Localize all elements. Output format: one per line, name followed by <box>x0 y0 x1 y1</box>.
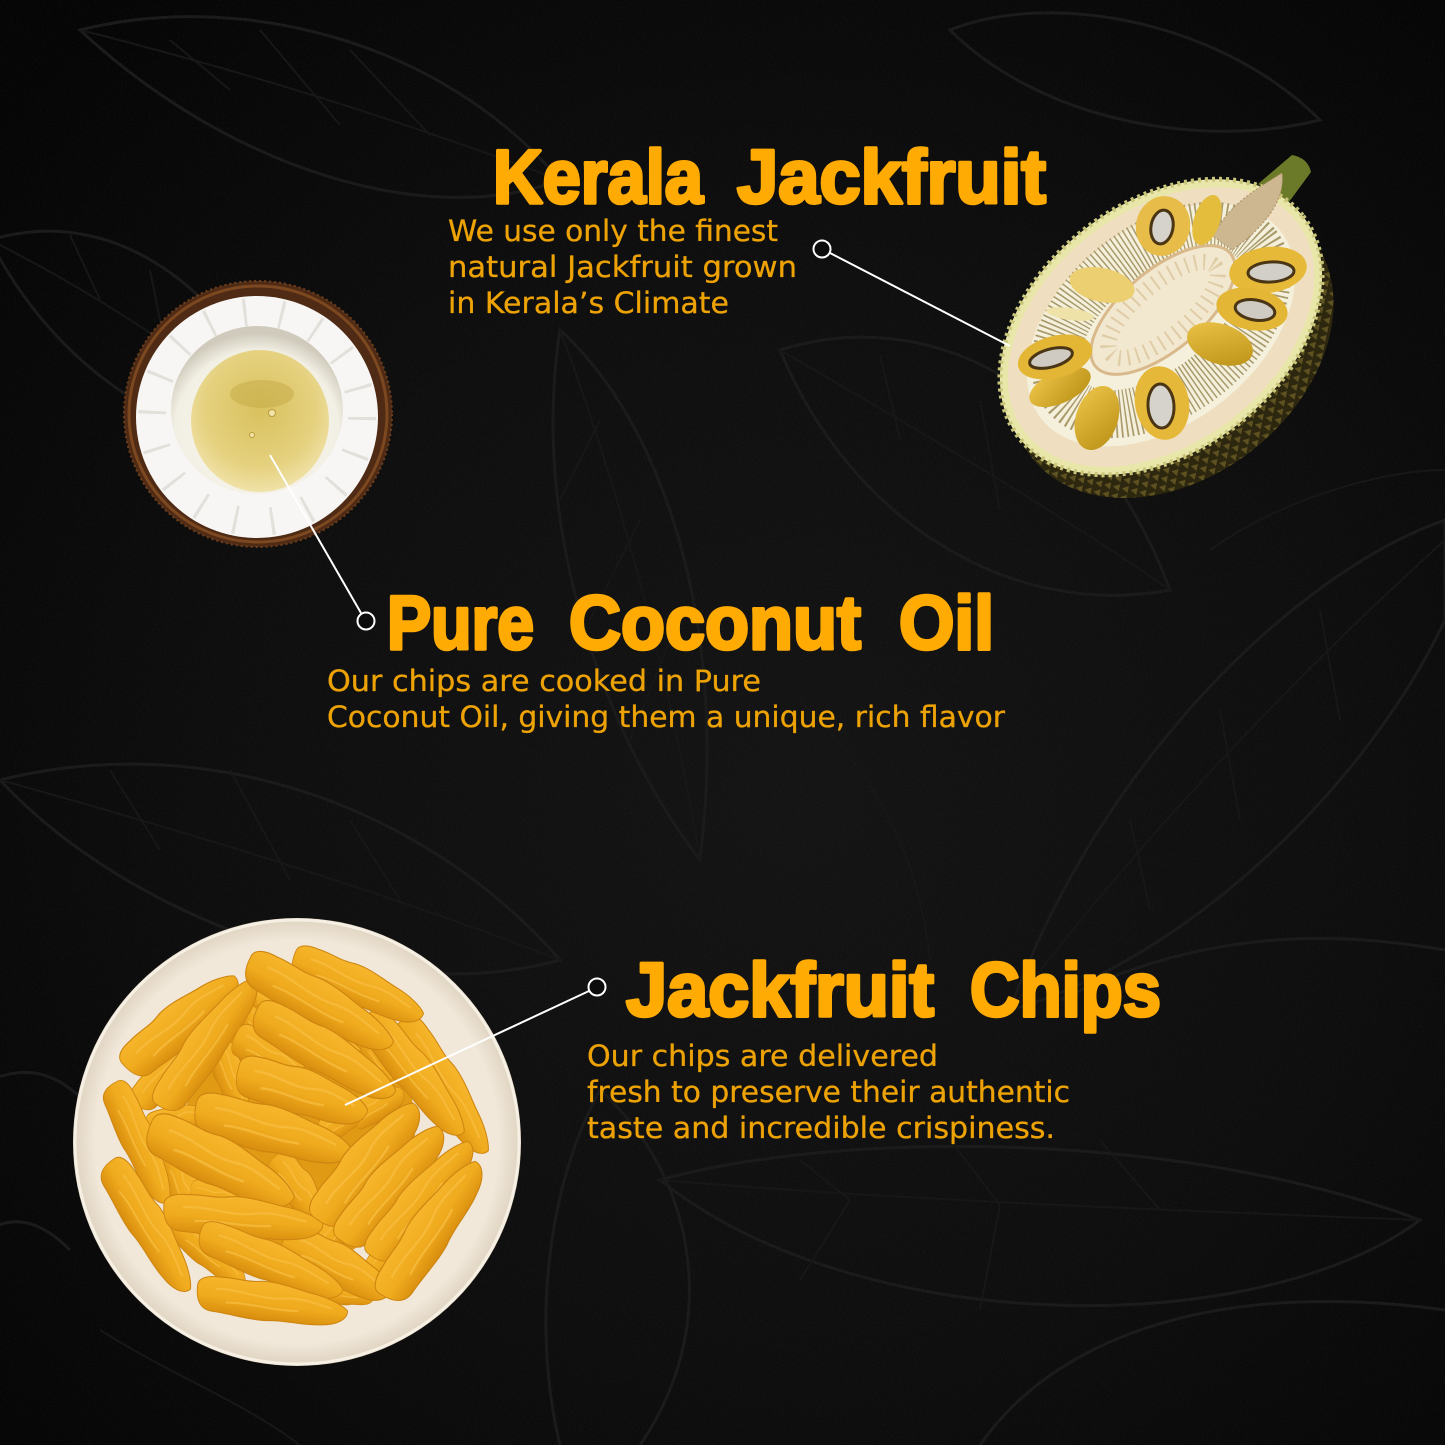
text: Kerala Jackfruit description <box>448 214 797 320</box>
text: chips description <box>587 1039 1070 1145</box>
heading: Pure Coconut Oil: Oil <box>899 581 994 666</box>
text: Kerala Jackfruit description: We use only the finest <box>448 214 778 248</box>
text: chips description: taste and incredible crispiness. <box>587 1111 1055 1145</box>
text: chips description: Our chips are delivered <box>587 1039 938 1073</box>
jackfruit cut face <box>943 118 1379 536</box>
text: Kerala Jackfruit description: in Kerala’s Climate <box>448 286 729 320</box>
chips pile <box>93 939 503 1332</box>
heading: Kerala Jackfruit: Kerala <box>493 135 704 220</box>
text: coconut oil description: Our chips are cooked in Pure <box>327 664 761 698</box>
text: coconut oil description: Coconut Oil, giving them a unique, rich flavor <box>327 700 1005 734</box>
heading: Pure Coconut Oil: Pure <box>387 581 534 666</box>
heading: Kerala Jackfruit: Jackfruit <box>737 135 1046 220</box>
heading: Jackfruit Chips: Chips <box>970 948 1161 1033</box>
bowl of jackfruit chips <box>73 918 521 1366</box>
heading: Pure Coconut Oil: Coconut <box>569 581 861 666</box>
leader line: jackfruit <box>814 240 1010 346</box>
jackfruit pods and seeds <box>1013 190 1310 456</box>
jackfruit rind <box>952 136 1392 560</box>
jackfruit stalk <box>1213 173 1282 250</box>
text: Kerala Jackfruit description: natural Jackfruit grown <box>448 250 797 284</box>
jackfruit stem end <box>1258 155 1311 206</box>
leader line: chips <box>345 978 606 1105</box>
text: chips description: fresh to preserve their authentic <box>587 1075 1070 1109</box>
heading: Jackfruit Chips: Jackfruit <box>626 948 934 1033</box>
jackfruit <box>943 118 1392 560</box>
text: coconut oil description <box>327 664 1005 734</box>
leader line: coconut oil <box>270 455 374 630</box>
coconut with oil <box>124 281 392 547</box>
